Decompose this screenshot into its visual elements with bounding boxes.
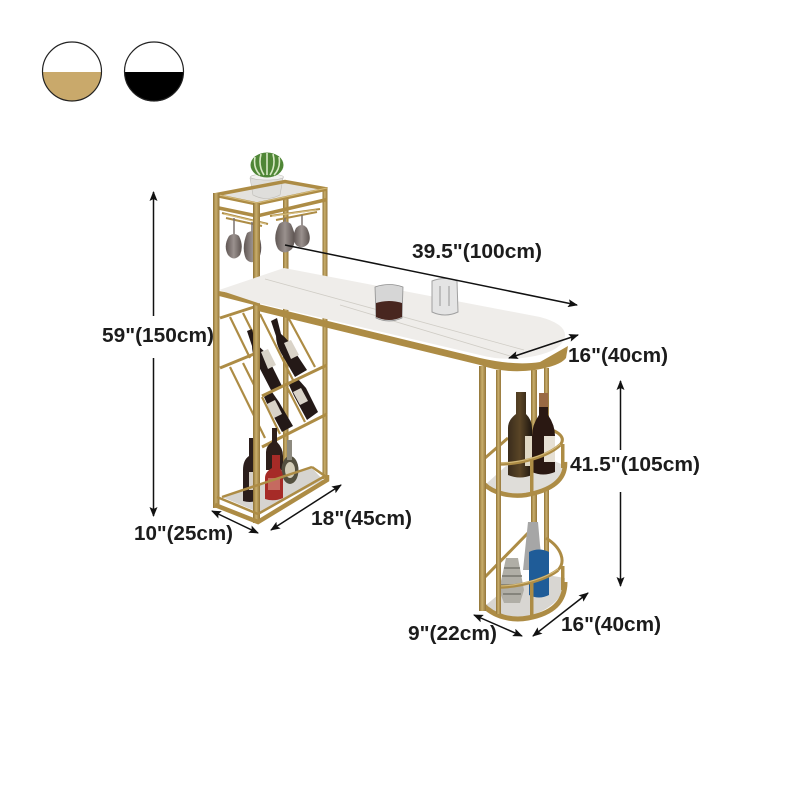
dimension: table length: 39.5"(100cm) bbox=[412, 241, 542, 263]
dimension: table length bbox=[285, 241, 577, 305]
colour swatch: black bbox=[124, 42, 184, 102]
top marble shelf bbox=[219, 181, 323, 203]
rack diagonal rods bbox=[230, 313, 315, 438]
top frame bbox=[214, 182, 327, 216]
hanging glass rails bbox=[222, 209, 320, 226]
dimension: table height: 41.5"(105cm) bbox=[570, 454, 700, 476]
dimension: pedestal width: 9"(22cm) bbox=[408, 623, 497, 645]
empty glass bbox=[432, 278, 458, 315]
wine rack tower bbox=[213, 152, 328, 523]
pedestal posts back bbox=[531, 368, 549, 610]
upper shelf rail bbox=[484, 444, 565, 496]
tower front frame bbox=[213, 193, 327, 523]
dimension: table depth bbox=[509, 335, 668, 367]
dimension: total height: 59"(150cm) bbox=[102, 325, 214, 347]
dimension: table depth: 16"(40cm) bbox=[568, 345, 668, 367]
upper half-round shelf bbox=[485, 428, 566, 495]
bar pedestal bbox=[479, 366, 566, 619]
dimension: tower depth bbox=[271, 485, 412, 530]
pedestal front posts bbox=[479, 366, 501, 614]
dimension: pedestal depth bbox=[533, 593, 661, 636]
lower half-round shelf bbox=[485, 533, 565, 617]
wine glasses bbox=[226, 215, 310, 262]
back posts bbox=[283, 185, 328, 485]
lower bottles bbox=[243, 428, 298, 502]
dimension: pedestal depth: 16"(40cm) bbox=[561, 614, 661, 636]
glass of red wine bbox=[375, 284, 403, 321]
marble table top bbox=[219, 268, 568, 371]
lower shelf rail bbox=[482, 566, 565, 619]
dimension: tower width: 10"(25cm) bbox=[134, 523, 233, 545]
racked wine bottles bbox=[247, 318, 318, 432]
base marble shelf bbox=[222, 468, 323, 513]
colour swatch: gold bbox=[42, 42, 102, 101]
dimension: tower depth: 18"(45cm) bbox=[311, 508, 412, 530]
upper shelf bottles bbox=[508, 392, 555, 478]
rack shelf frames bbox=[220, 307, 327, 447]
lower shelf vases bbox=[499, 522, 549, 603]
dimension: tower width bbox=[134, 511, 258, 545]
plant in pot bbox=[250, 152, 284, 198]
dimension: pedestal width bbox=[408, 615, 522, 645]
